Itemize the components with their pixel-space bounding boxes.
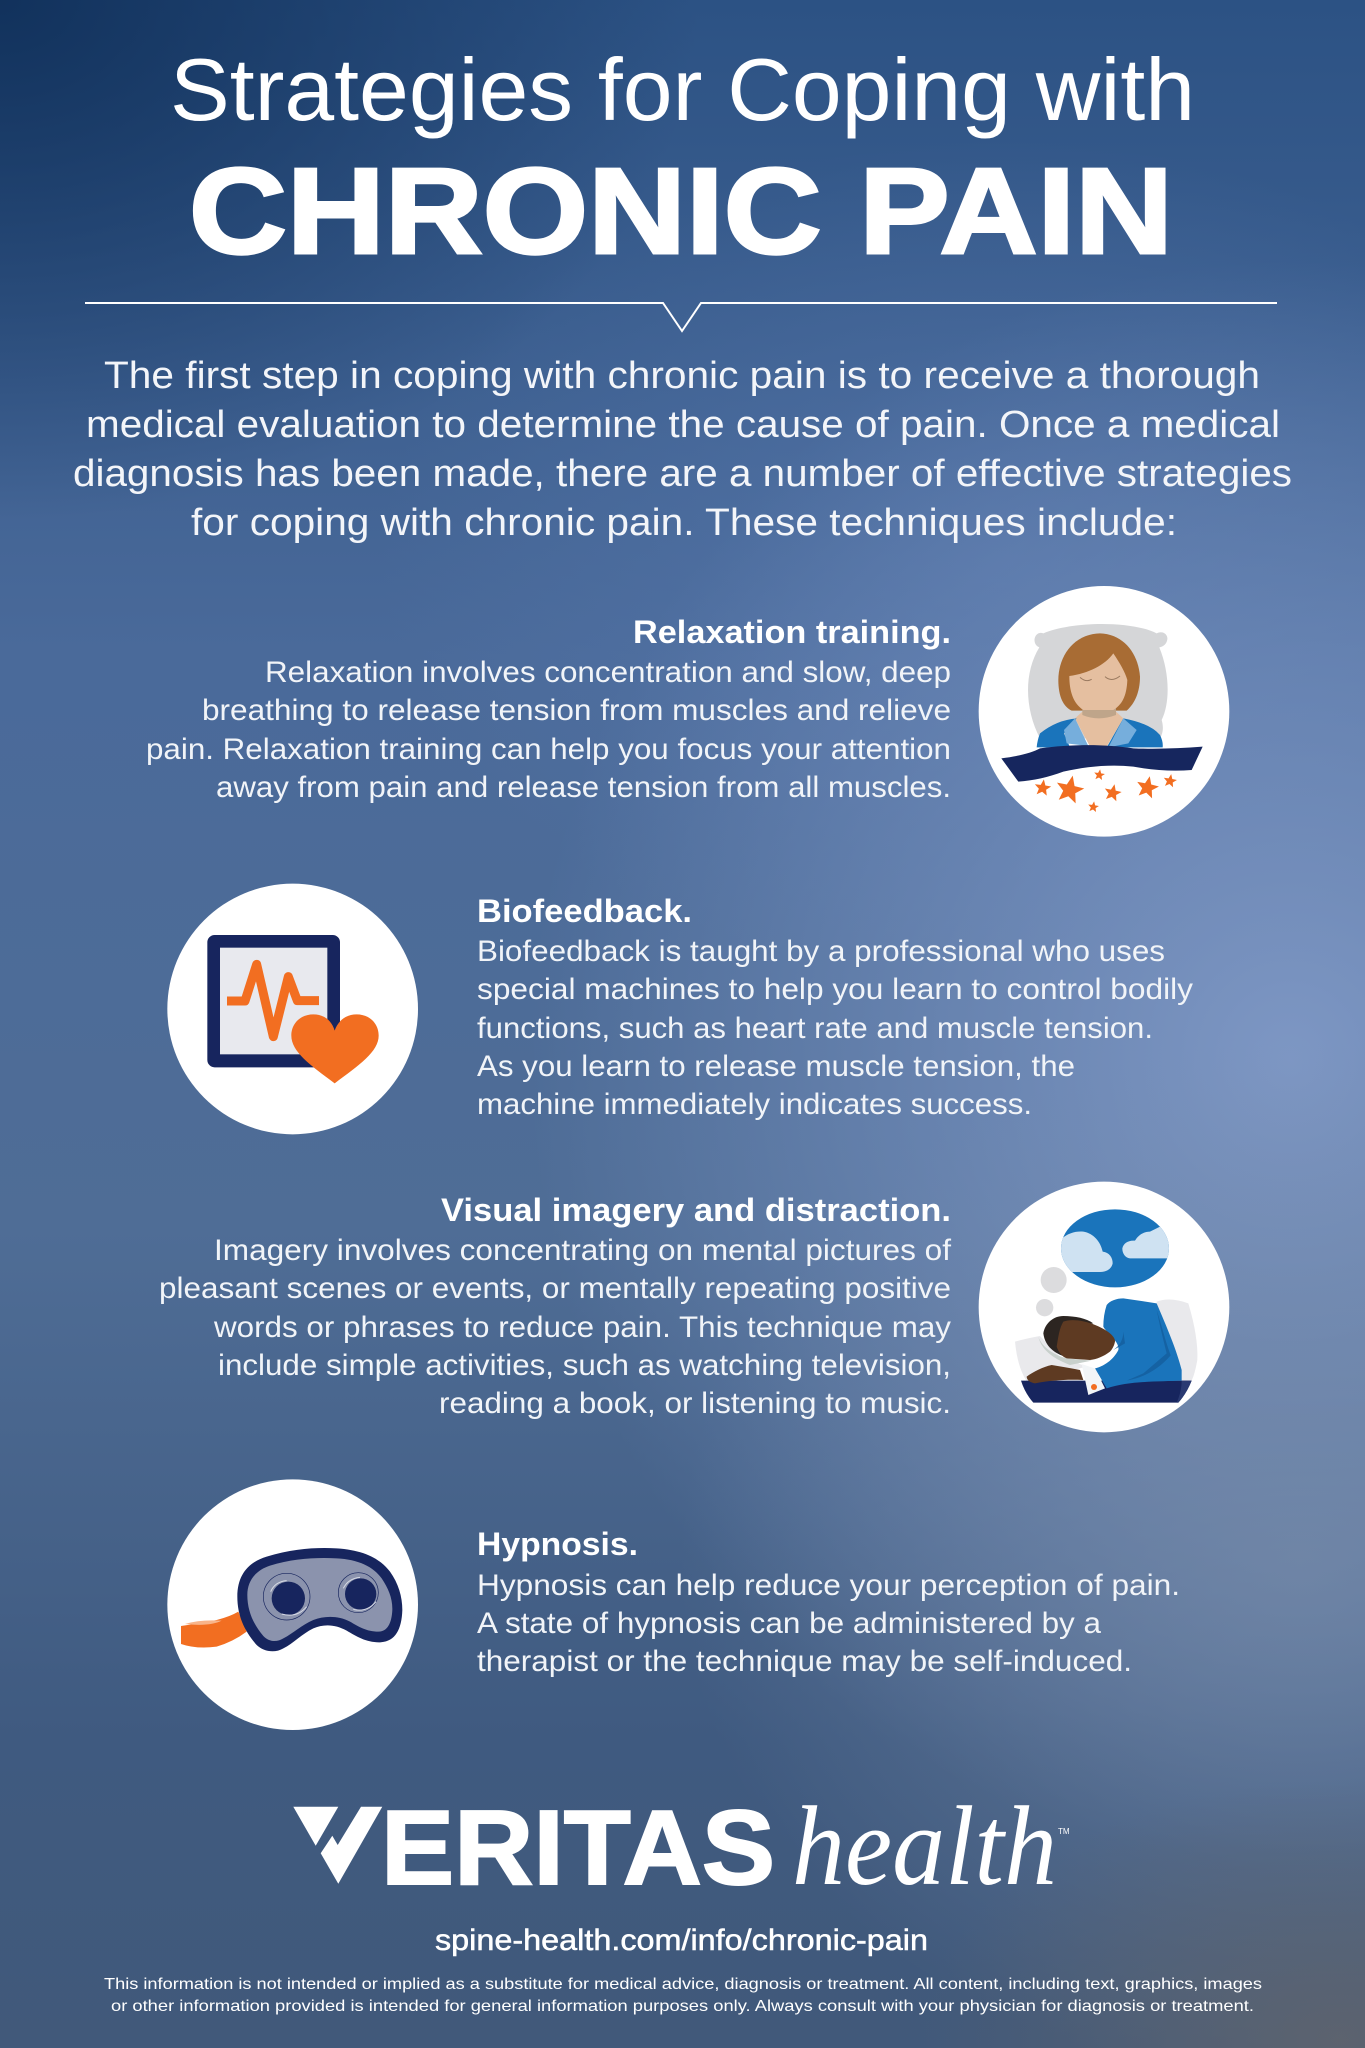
- icon: hypnosis eye mask: [167, 1479, 418, 1730]
- panel: hypnosis text: Hypnosis.: [477, 1526, 638, 1562]
- panel: visual imagery text: Visual imagery and distraction.: [441, 1192, 951, 1228]
- logo: Veritas Health: ERITAS: [381, 1789, 775, 1907]
- logo: Veritas Health: TM: [1058, 1827, 1070, 1836]
- panel: visual imagery text: reading a book, or listening to music.: [439, 1387, 951, 1420]
- panel: biofeedback text: [477, 893, 1193, 1121]
- intro paragraph: [73, 355, 1292, 544]
- icon: monitor with heart: [167, 884, 418, 1134]
- intro paragraph: medical evaluation to determine the cause of pain. Once a medical: [86, 404, 1280, 446]
- panel: biofeedback text: functions, such as heart rate and muscle tension.: [477, 1012, 1153, 1045]
- panel: biofeedback text: Biofeedback is taught by a professional who uses: [477, 935, 1165, 968]
- title: Strategies for Coping with: [170, 40, 1195, 139]
- logo: Veritas Health: [293, 1784, 1070, 1909]
- disclaimer: or other information provided is intended for general information purposes only. Always consult with your physician for diagnosis or treatment.: [111, 1998, 1254, 2015]
- panel: relaxation training text: breathing to release tension from muscles and relieve: [202, 694, 951, 727]
- intro paragraph: diagnosis has been made, there are a number of effective strategies: [73, 453, 1292, 495]
- panel: hypnosis text: Hypnosis can help reduce your perception of pain.: [477, 1569, 1180, 1602]
- panel: relaxation training text: pain. Relaxation training can help you focus your attention: [146, 733, 951, 766]
- panel: visual imagery text: include simple activities, such as watching television,: [218, 1349, 951, 1382]
- title: [170, 40, 1195, 279]
- intro paragraph: for coping with chronic pain. These techniques include:: [191, 502, 1177, 544]
- panel: relaxation training text: Relaxation training.: [633, 614, 951, 650]
- panel: biofeedback text: Biofeedback.: [477, 893, 692, 929]
- intro paragraph: The first step in coping with chronic pain is to receive a thorough: [104, 355, 1260, 397]
- panel: visual imagery text: Imagery involves concentrating on mental pictures of: [214, 1234, 952, 1267]
- panel: visual imagery text: pleasant scenes or events, or mentally repeating positive: [159, 1272, 951, 1305]
- panel: biofeedback text: As you learn to release muscle tension, the: [477, 1050, 1075, 1083]
- panel: biofeedback text: machine immediately indicates success.: [477, 1088, 1032, 1121]
- disclaimer: [104, 1976, 1262, 2015]
- panel: hypnosis text: [477, 1526, 1180, 1678]
- panel: hypnosis text: A state of hypnosis can be administered by a: [477, 1607, 1101, 1640]
- panel: visual imagery text: [159, 1192, 952, 1420]
- panel: visual imagery text: words or phrases to reduce pain. This technique may: [213, 1311, 951, 1344]
- panel: relaxation training text: away from pain and release tension from all muscles.: [216, 771, 951, 804]
- panel: relaxation training text: [146, 614, 951, 804]
- logo: Veritas Health: health: [792, 1784, 1057, 1909]
- icon: sleeping woman with stars: [979, 586, 1229, 837]
- disclaimer: This information is not intended or implied as a substitute for medical advice, diagnosis or treatment. All content, including text, graphics, images: [104, 1976, 1262, 1993]
- panel: hypnosis text: therapist or the technique may be self-induced.: [477, 1645, 1132, 1678]
- title: CHRONIC PAIN: [189, 143, 1173, 279]
- panel: biofeedback text: special machines to help you learn to control bodily: [477, 973, 1193, 1006]
- website url: spine-health.com/info/chronic-pain: [435, 1924, 928, 1957]
- panel: relaxation training text: Relaxation involves concentration and slow, deep: [265, 656, 951, 689]
- icon: daydreaming man at desk: [979, 1182, 1229, 1432]
- divider with notch: [85, 303, 1277, 331]
